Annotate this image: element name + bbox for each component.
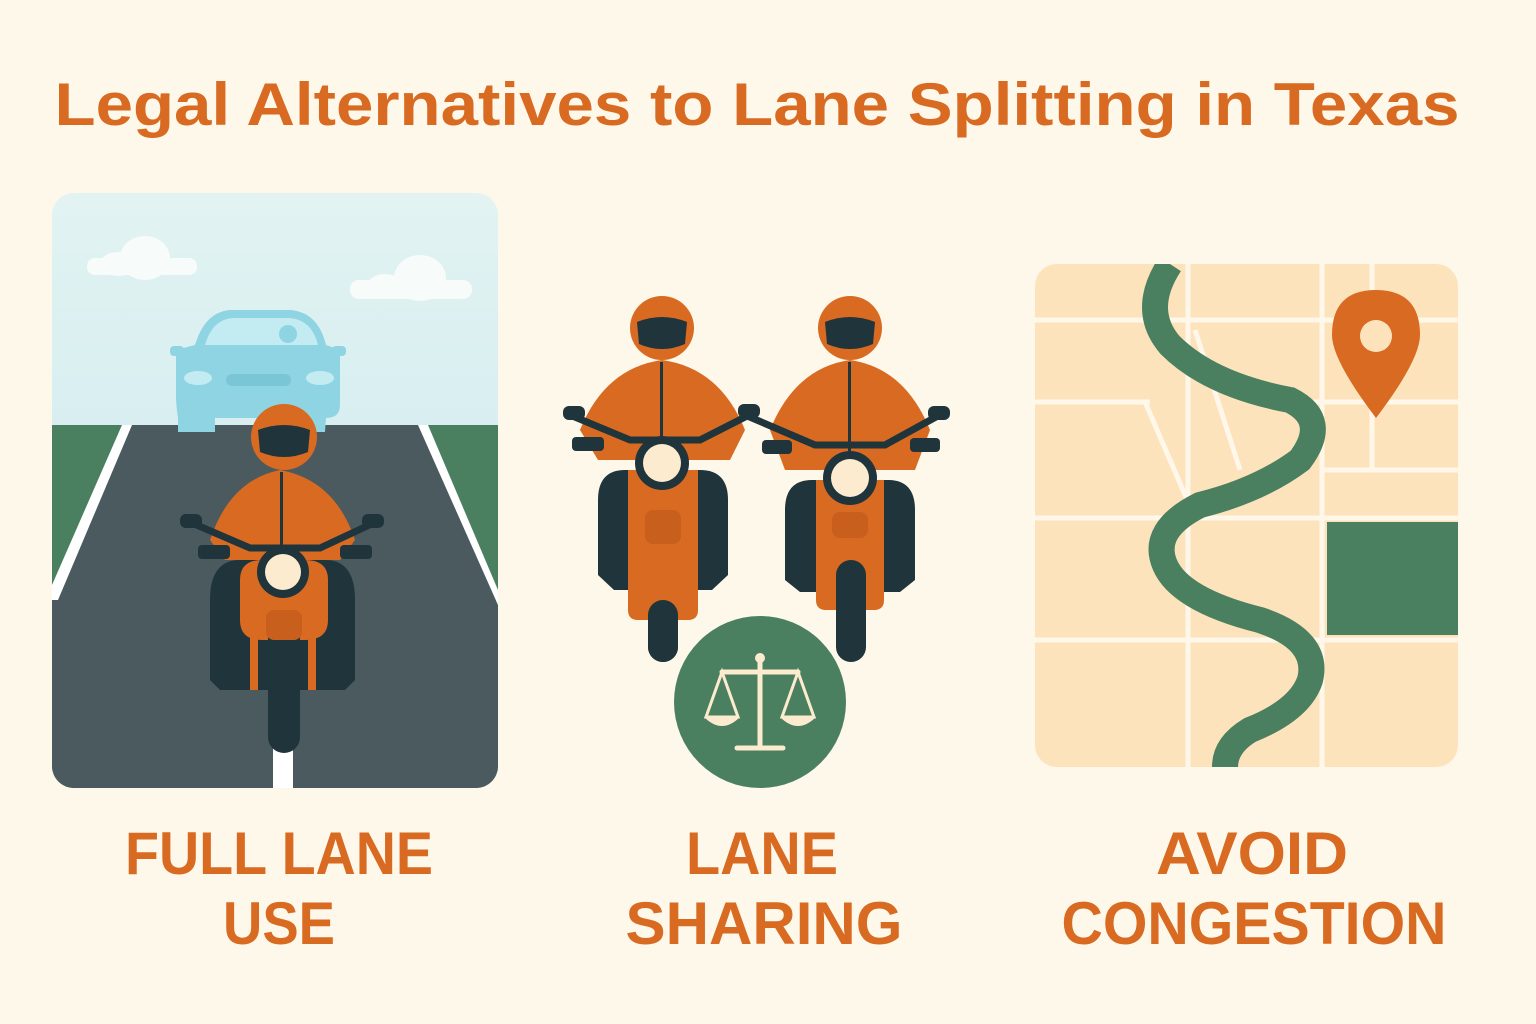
label: avoid congestion: CONGESTION <box>1062 890 1446 957</box>
panel: avoid congestion map <box>1035 264 1458 767</box>
label: full lane use: USE <box>223 890 335 957</box>
label: full lane use: FULL LANE <box>125 820 433 887</box>
icon: scales of justice <box>674 616 846 788</box>
label: lane sharing: SHARING <box>626 890 902 957</box>
label: avoid congestion: AVOID <box>1156 820 1348 887</box>
title: Legal Alternatives to Lane Splitting in Texas <box>54 71 1460 138</box>
icon: rider left <box>563 296 760 662</box>
icon: clouds <box>87 236 472 301</box>
icon: rider right <box>745 296 950 662</box>
icon: car <box>170 310 346 432</box>
icon: motorcyclist front <box>180 404 384 753</box>
icon: location pin <box>1332 290 1420 418</box>
panel: lane sharing <box>563 296 950 788</box>
panel: full lane use <box>52 193 498 788</box>
label: lane sharing: LANE <box>686 820 838 887</box>
